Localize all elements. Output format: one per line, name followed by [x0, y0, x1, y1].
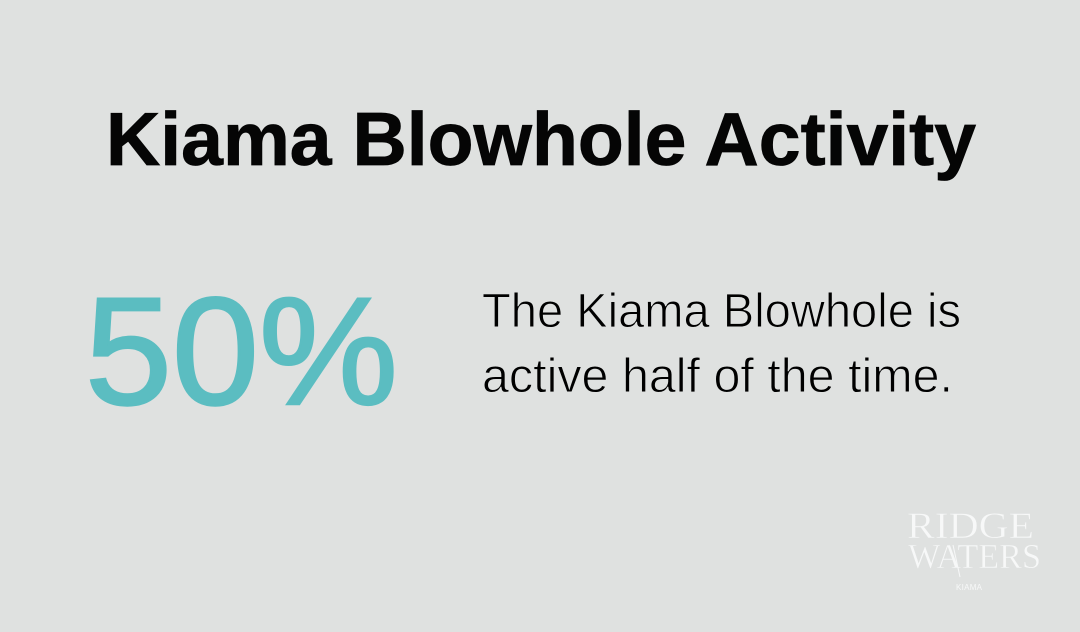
- big statistic: 50%: 50%: [85, 266, 398, 437]
- logo: Ridge Waters Kiama: WATERS: [908, 537, 1041, 576]
- title: Kiama Blowhole Activity: [106, 97, 976, 181]
- description text: The Kiama Blowhole is: [482, 285, 961, 338]
- logo: Ridge Waters Kiama: [907, 506, 1041, 592]
- description text: active half of the time.: [482, 350, 953, 403]
- logo: Ridge Waters Kiama: RIDGE: [907, 506, 1034, 547]
- description text: [482, 285, 961, 403]
- logo: Ridge Waters Kiama: KIAMA: [956, 583, 983, 592]
